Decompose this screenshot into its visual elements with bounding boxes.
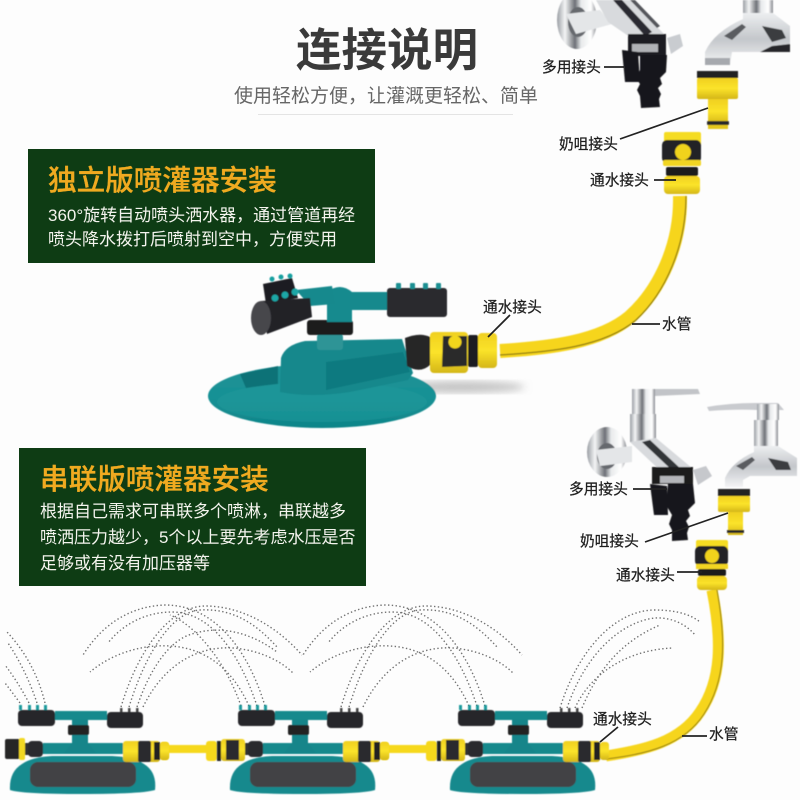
label: quick connector (series): 通水接头 <box>593 711 652 728</box>
label: multi-purpose adapter (top) <box>542 59 624 76</box>
label: quick connector (main sprinkler) <box>483 299 542 337</box>
label: multi-purpose adapter (top): 多用接头 <box>542 59 601 76</box>
label: quick connector (top): 通水接头 <box>590 172 649 189</box>
label: hose (lower): 水管 <box>709 726 738 743</box>
illustration: series sprinkler 3 <box>437 705 609 794</box>
label: hose (top): 水管 <box>662 316 691 333</box>
panel heading: standalone: 独立版喷灌器安装 <box>48 165 277 197</box>
label: multi-purpose adapter (lower): 多用接头 <box>569 481 628 498</box>
illustration: lower left faucet with multi-purpose adapter <box>587 389 712 541</box>
illustration: lower quick connector and hose <box>606 540 728 759</box>
label: hose (lower) <box>682 726 738 743</box>
subtitle: 使用轻松方便，让灌溉更轻松、简单 <box>234 85 538 107</box>
label: quick connector (top) <box>590 172 676 189</box>
label: hose (top) <box>632 316 691 333</box>
panel: standalone installation <box>28 149 375 263</box>
illustration: lower right faucet <box>707 403 797 487</box>
illustration: series hoses <box>160 741 437 761</box>
illustration: top left faucet with multi-purpose adapter <box>557 0 683 108</box>
label: multi-purpose adapter (lower) <box>569 481 667 498</box>
panel: series installation <box>19 448 366 586</box>
illustration: top nipple adapter <box>697 71 738 129</box>
illustration: water spray arcs <box>5 605 700 708</box>
label: nipple adapter (top): 奶咀接头 <box>559 136 618 153</box>
panel text: standalone: 360°旋转自动喷头洒水器，通过管道再经 <box>48 206 355 225</box>
panel text: series: 足够或有没有加压器等 <box>40 554 210 573</box>
illustration: top quick connector and hose <box>500 132 701 355</box>
illustration: series sprinkler 2 <box>217 705 389 794</box>
illustration: series sprinkler 1 <box>5 705 169 794</box>
panel text: series: 喷洒压力越少，5个以上要先考虑水压是否 <box>40 528 355 547</box>
panel text: standalone: 喷头降水拨打后喷射到空中，方便实用 <box>48 230 337 249</box>
label: nipple adapter (top) <box>559 108 708 153</box>
illustration: main sprinkler <box>208 274 525 428</box>
label: quick connector (main sprinkler): 通水接头 <box>483 299 542 316</box>
panel text: series <box>40 502 355 573</box>
label: quick connector (lower): 通水接头 <box>616 567 675 584</box>
panel text: series: 根据自己需求可串联多个喷淋，串联越多 <box>40 502 346 521</box>
panel text: standalone <box>48 206 355 249</box>
label: nipple adapter (lower) <box>580 513 728 550</box>
illustration: top right faucet <box>705 0 790 65</box>
label: nipple adapter (lower): 奶咀接头 <box>580 533 639 550</box>
illustration: lower nipple adapter <box>718 489 750 535</box>
panel heading: series: 串联版喷灌器安装 <box>40 464 269 496</box>
label: quick connector (series) <box>593 711 652 742</box>
label: quick connector (lower) <box>616 567 702 584</box>
title: 连接说明 <box>296 25 478 76</box>
